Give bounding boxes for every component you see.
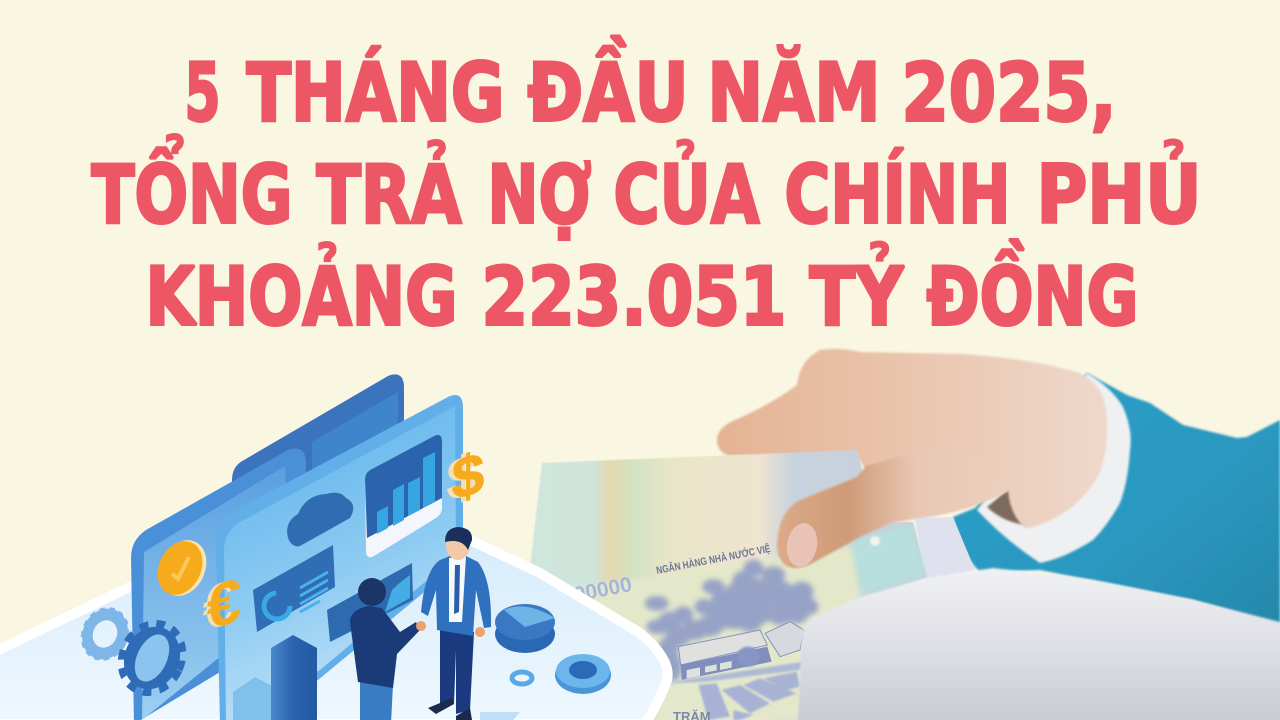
house windows [687, 661, 732, 679]
banknote lower band [560, 540, 880, 720]
title: ĐỒNG [926, 240, 1138, 344]
white paper stack [798, 568, 1280, 720]
illustration: business and finance dashboard [0, 374, 668, 720]
shirt panel behind banknote [915, 517, 975, 580]
title: THÁNG [246, 46, 504, 140]
title: KHOẢNG [146, 242, 458, 344]
lower platform tile [480, 712, 520, 720]
banknote denomination: 000000 [561, 573, 634, 609]
note sheen [870, 536, 880, 546]
main house wall [681, 647, 772, 680]
person left [350, 578, 426, 720]
title: CHÍNH [784, 148, 1010, 242]
side house roof [765, 622, 804, 657]
suit sleeve [953, 373, 1280, 625]
left screen [131, 448, 306, 720]
hand and index finger [717, 349, 1107, 528]
main screen [216, 395, 463, 720]
icon: gold coin check [149, 532, 215, 604]
isometric platform [0, 540, 668, 720]
icon: dollar sign: $ [447, 442, 479, 514]
small ring [512, 672, 532, 684]
title: ĐẦU [528, 36, 688, 140]
thumb [777, 440, 1010, 568]
photo: hand holding banknotes [530, 349, 1280, 720]
title: 223.051 [482, 250, 786, 344]
icon: small gear [75, 602, 135, 666]
title: 2025, [902, 46, 1116, 140]
yard bush [737, 647, 760, 667]
main house roof [678, 630, 767, 665]
title: TRẢ [316, 140, 462, 242]
wave panel [327, 563, 413, 642]
title: CỦA [614, 140, 760, 242]
wrist shadow [987, 488, 1030, 525]
banknote inscription: NGÂN HÀNG NHÀ NƯỚC VIỆ [655, 542, 771, 577]
icon: euro sign: € [207, 565, 241, 644]
title: 5 [184, 46, 220, 140]
title: NĂM [708, 44, 880, 140]
thumbnail [783, 521, 821, 569]
title: PHỦ [1036, 140, 1202, 242]
teal note corner [850, 524, 925, 595]
tree foliage [645, 560, 818, 681]
pie chart [495, 604, 555, 653]
icon: euro sign: € [203, 566, 237, 645]
gauge panel [253, 545, 335, 632]
icon: cloud [287, 493, 353, 546]
chart panel [365, 435, 442, 557]
rice field rows [698, 672, 800, 720]
title: TỔNG [92, 134, 292, 242]
title: NỢ [488, 148, 592, 242]
icon: large gear [110, 614, 194, 702]
back screen [232, 374, 404, 560]
title: TỶ [810, 240, 904, 344]
ground shadow [670, 662, 803, 683]
icon: dollar sign: $ [452, 441, 484, 513]
person right [421, 527, 491, 720]
banknote [530, 450, 927, 720]
shirt cuff [977, 373, 1131, 563]
title [92, 36, 1202, 344]
bar blocks [233, 635, 317, 720]
engraving: palm trees and house [645, 560, 818, 720]
ring disc [555, 654, 611, 694]
